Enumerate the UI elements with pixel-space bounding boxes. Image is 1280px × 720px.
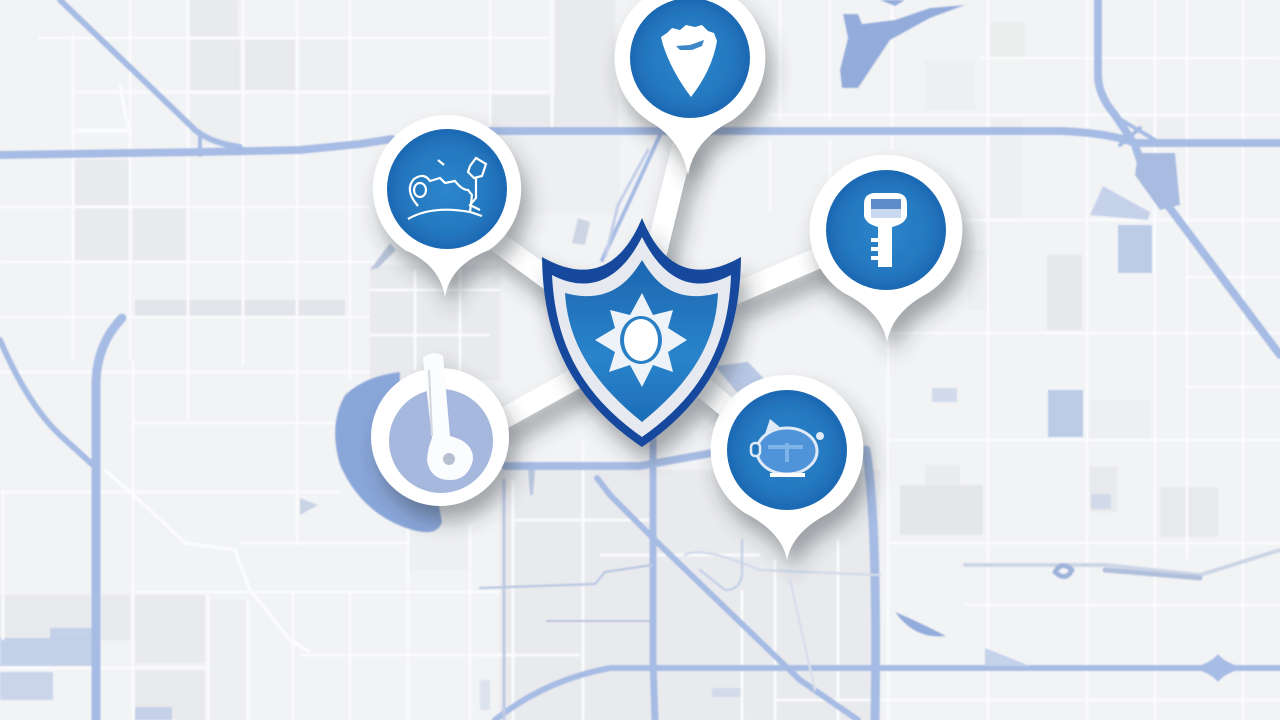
pin: top crest bbox=[615, 0, 765, 175]
icon: piggy bbox=[751, 419, 824, 475]
pin: piggy bank bbox=[711, 375, 863, 560]
icon: sketch bbox=[408, 158, 486, 219]
interchange bump bbox=[1190, 654, 1246, 682]
pin: thermometer bbox=[371, 353, 509, 506]
icon: thermometer bbox=[423, 353, 473, 480]
icon: shield crest bbox=[661, 25, 717, 97]
diagonal white roads bbox=[75, 85, 310, 652]
blue-grey blocks bbox=[0, 225, 1152, 720]
icon: sun star bbox=[595, 293, 687, 387]
pin: key bbox=[810, 155, 962, 342]
connector lines bbox=[495, 140, 832, 422]
icon: key bbox=[864, 193, 907, 267]
lakes bbox=[300, 0, 1180, 666]
pin: sketch pig bbox=[373, 115, 521, 297]
central shield bbox=[542, 218, 741, 447]
